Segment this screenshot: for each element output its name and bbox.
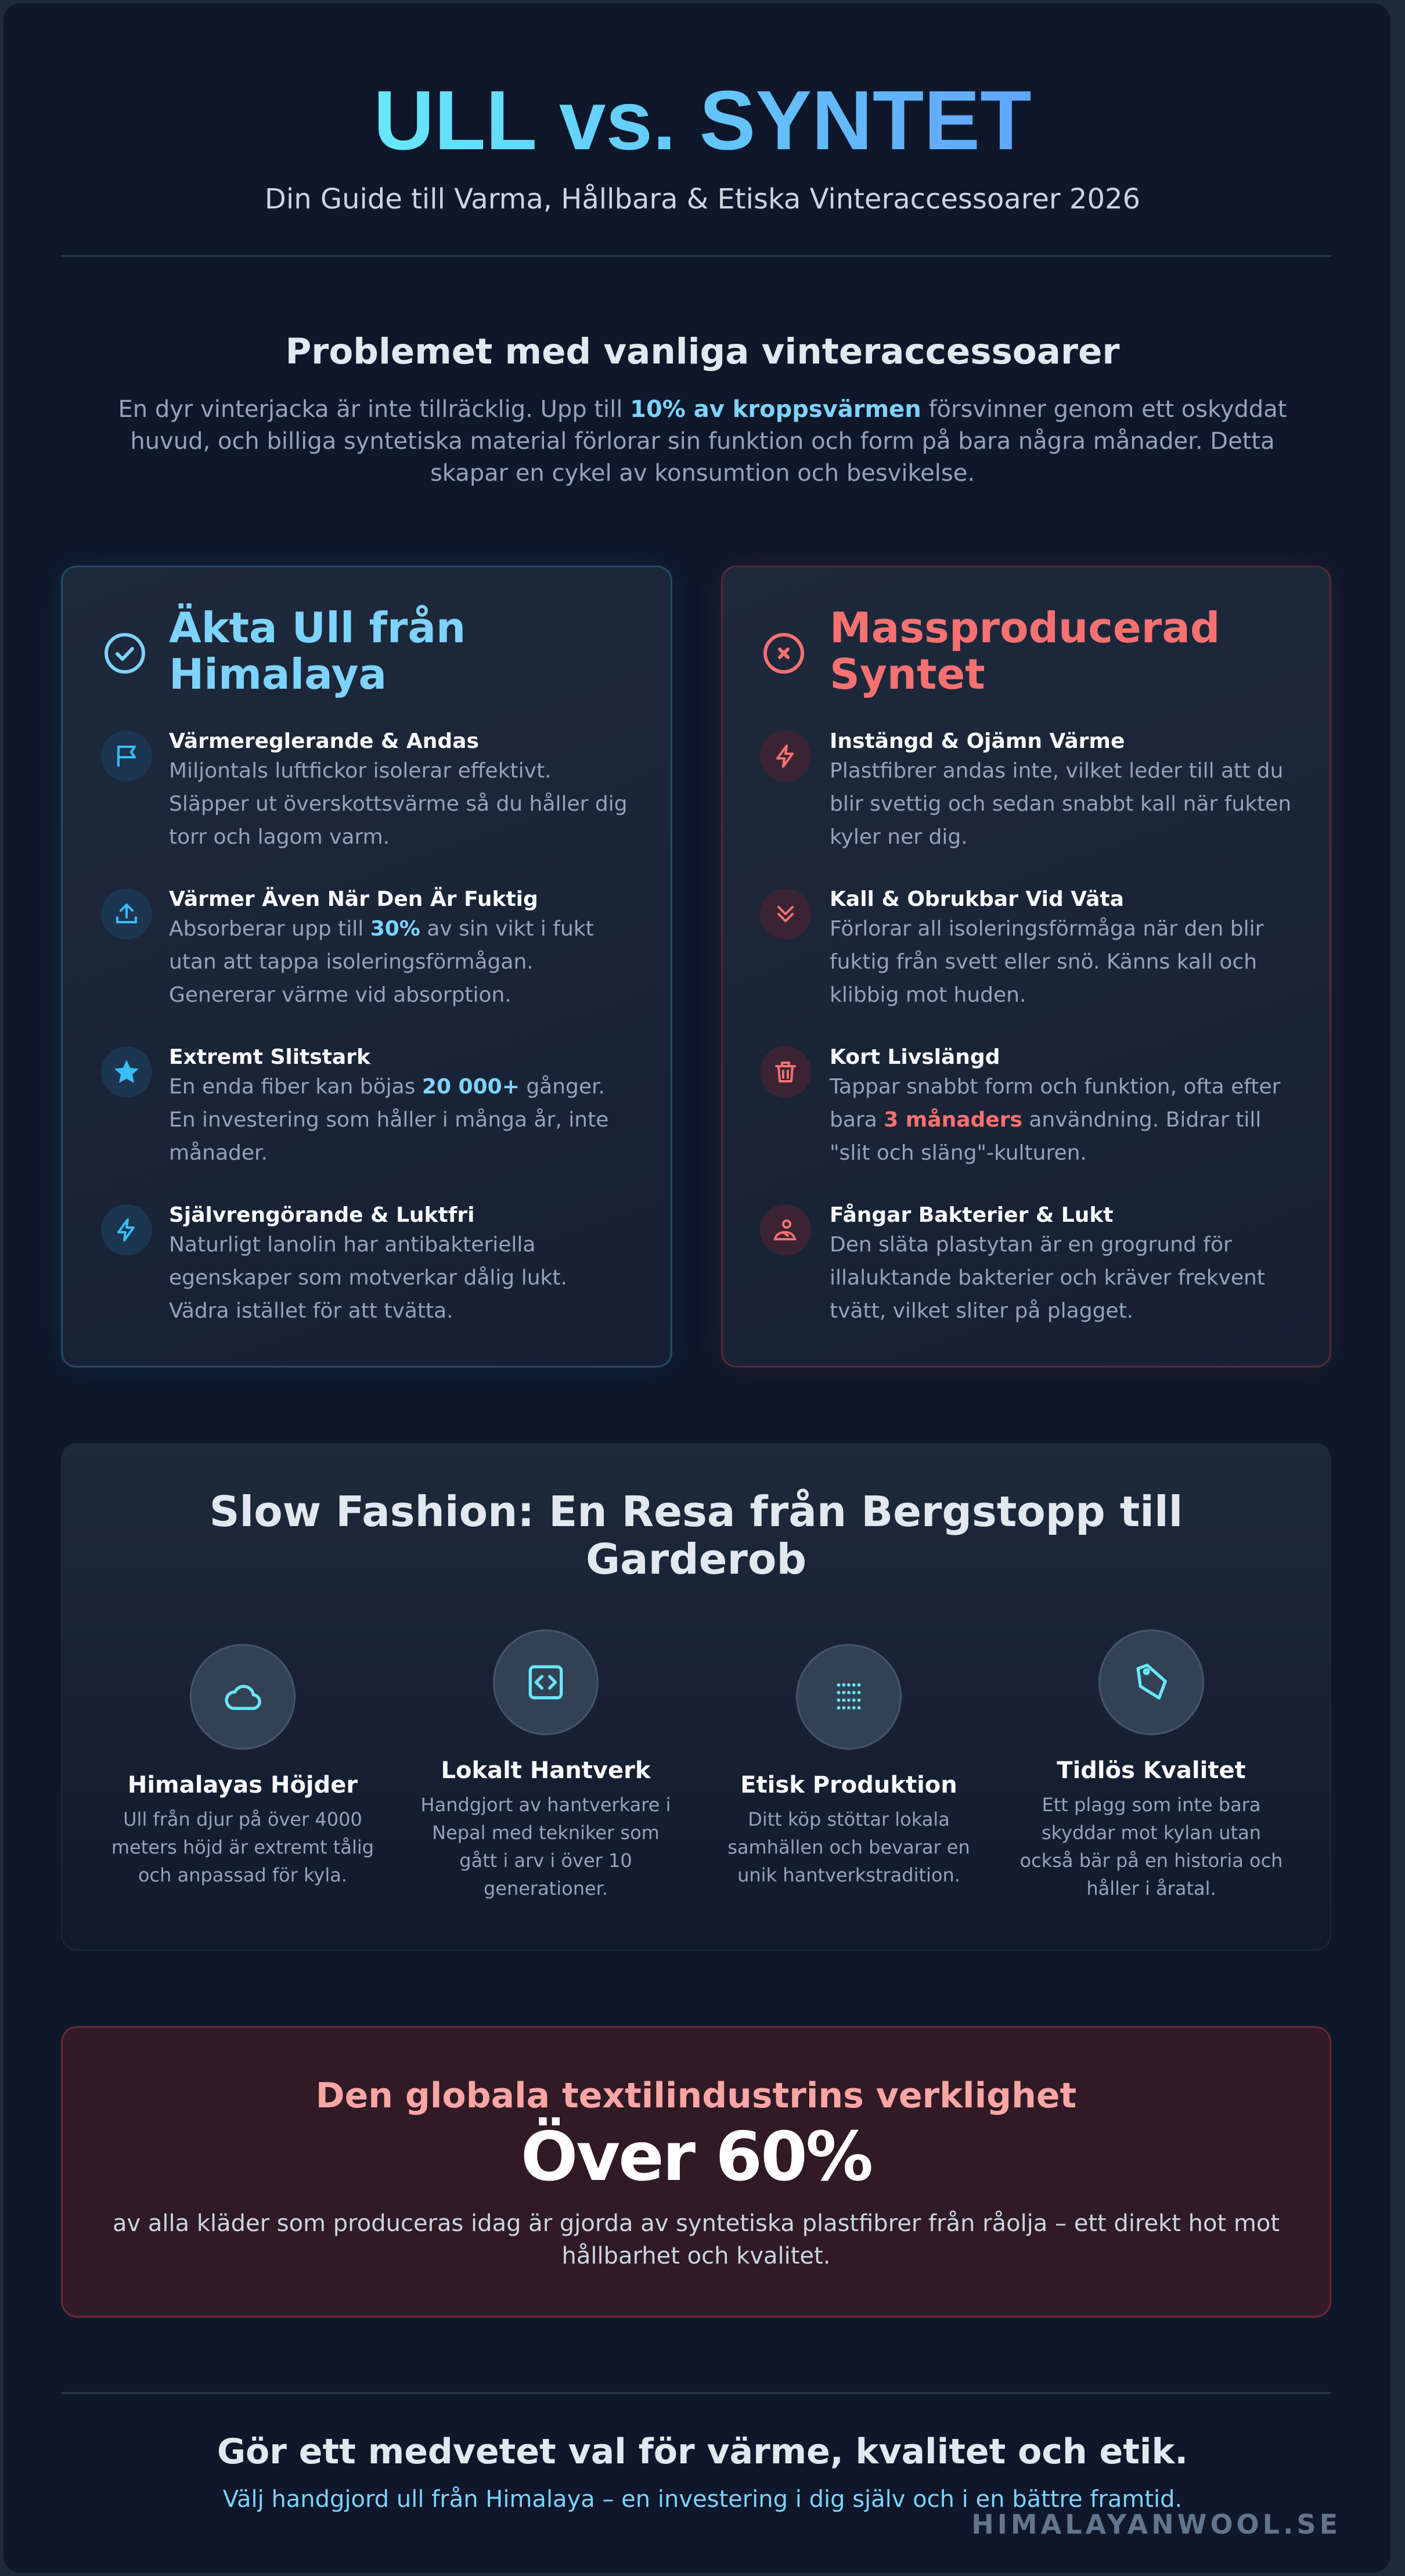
heading: synthetic [830, 603, 1220, 699]
item: cold when wet: Kall & Obrukbar Vid Väta [830, 887, 1124, 911]
item: self-cleaning: Självrengörande & Luktfri [169, 1203, 474, 1227]
item: short lifespan [760, 1045, 1281, 1165]
item: short lifespan: "slit och släng"-kulturen. [830, 1141, 1087, 1165]
item: uneven heat: blir svettig och sedan snabbt kall när fukten [830, 792, 1291, 816]
step: craft: generationer. [484, 1877, 608, 1899]
item: short lifespan: Tappar snabbt form och funktion, ofta efter [830, 1075, 1280, 1099]
item: uneven heat: Plastfibrer andas inte, vilket leder till att du [830, 759, 1283, 783]
item: bacteria: Den släta plastytan är en grogrund för [830, 1233, 1232, 1257]
text block: problem description: skapar en cykel av konsumtion och besvikelse. [430, 460, 975, 487]
item: uneven heat: Instängd & Ojämn Värme [830, 729, 1125, 753]
step: mountains: Ull från djur på över 4000 [123, 1808, 362, 1830]
item: moisture: Värmer Även När Den Är Fuktig [169, 887, 538, 911]
icon: check circle [105, 633, 145, 674]
item: temperature: torr och lagom varm. [169, 825, 390, 849]
item: temperature: Släpper ut överskottsvärme så du håller dig [169, 792, 628, 816]
icon: flag [101, 731, 152, 782]
text block: callout description [113, 2210, 1280, 2269]
item: moisture: utan att tappa isoleringsförmågan. [169, 950, 534, 974]
step: timeless: håller i åratal. [1086, 1877, 1216, 1899]
text block: callout description: hållbarhet och kvalitet. [562, 2243, 830, 2269]
heading: slow fashion [210, 1487, 1183, 1584]
step: ethical [727, 1644, 970, 1886]
title: ULL vs. SYNTET [373, 73, 1032, 167]
heading: wool: Äkta Ull från [169, 603, 466, 652]
step: ethical: Ditt köp stöttar lokala [748, 1808, 950, 1830]
stat: over 60%: Över 60% [521, 2118, 871, 2196]
icon: trash [760, 1046, 811, 1098]
step: mountains: meters höjd är extremt tålig [111, 1836, 374, 1858]
icon: upload [101, 888, 152, 940]
icon: bolt [101, 1204, 152, 1255]
heading: problem: Problemet med vanliga vinteraccessoarer [286, 331, 1119, 372]
icon: bacteria [760, 1204, 811, 1255]
text block: callout description: av alla kläder som produceras idag är gjorda av syntetiska plastfibrer från råolja – ett direkt hot mot [113, 2210, 1280, 2237]
step: timeless: Tidlös Kvalitet [1057, 1757, 1246, 1784]
item: cold when wet: klibbig mot huden. [830, 983, 1026, 1007]
text block: problem description [118, 396, 1287, 487]
panel: wool [61, 566, 672, 1368]
heading: wool: Himalaya [169, 650, 387, 699]
item: temperature: Värmereglerande & Andas [169, 729, 479, 753]
step: craft: Handgjort av hantverkare i [421, 1794, 671, 1816]
text block: problem description: En dyr vinterjacka är inte tillräcklig. Upp till 10% av kroppsvärmen försvinner genom ett oskyddat [118, 396, 1287, 423]
icon: dot grid [796, 1644, 902, 1750]
panel: synthetic [721, 566, 1331, 1368]
item: moisture [101, 887, 594, 1007]
item: bacteria: Fångar Bakterier & Lukt [830, 1203, 1114, 1227]
heading: slow fashion: Garderob [586, 1535, 806, 1584]
item: self-cleaning: Vädra istället för att tvätta. [169, 1299, 453, 1323]
item: durable [101, 1045, 608, 1165]
item: temperature [101, 729, 628, 849]
subtitle: Din Guide till Varma, Hållbara & Etiska Vinteraccessoarer 2026 [265, 183, 1140, 215]
step: craft: gått i arv i över 10 [459, 1850, 632, 1872]
step: craft: Lokalt Hantverk [441, 1757, 650, 1784]
heading: callout: Den globala textilindustrins verklighet [316, 2075, 1076, 2116]
item: bacteria [760, 1203, 1265, 1323]
step: timeless [1020, 1629, 1282, 1899]
heading: synthetic: Syntet [830, 650, 985, 699]
step: craft [421, 1629, 671, 1899]
text block: problem description: huvud, och billiga syntetiska material förlorar sin funktion och form på bara några månader. Detta [130, 428, 1275, 455]
callout: global textile industry [61, 2026, 1331, 2318]
icon: x circle [763, 633, 804, 674]
item: moisture: Genererar värme vid absorption. [169, 983, 511, 1007]
heading: wool [169, 603, 466, 699]
item: temperature: Miljontals luftfickor isolerar effektivt. [169, 759, 552, 783]
icon: tag [1098, 1629, 1204, 1735]
item: short lifespan: Kort Livslängd [830, 1045, 1000, 1069]
footer subtext: Välj handgjord ull från Himalaya – en investering i dig själv och i en bättre framtid. [223, 2486, 1182, 2513]
icon: star [101, 1046, 152, 1098]
icon: cloud [190, 1644, 296, 1750]
step: ethical: samhällen och bevarar en [727, 1836, 970, 1858]
item: cold when wet: fuktig från svett eller snö. Känns kall och [830, 950, 1257, 974]
step: timeless: skyddar mot kylan utan [1042, 1822, 1261, 1844]
item: self-cleaning [101, 1203, 567, 1323]
panel: slow fashion [61, 1443, 1331, 1951]
item: cold when wet: Förlorar all isoleringsförmåga när den blir [830, 917, 1263, 941]
item: bacteria: illaluktande bakterier och kräver frekvent [830, 1266, 1265, 1290]
brand: himalayanwool.se: HIMALAYANWOOL.SE [971, 2509, 1341, 2540]
item: uneven heat: kyler ner dig. [830, 825, 968, 849]
item: durable: En investering som håller i många år, inte [169, 1108, 608, 1132]
item: moisture: Absorberar upp till 30% av sin vikt i fukt [169, 917, 594, 941]
step: craft: Nepal med tekniker som [432, 1822, 660, 1844]
heading: slow fashion: Slow Fashion: En Resa från Bergstopp till [210, 1487, 1183, 1536]
heading: synthetic: Massproducerad [830, 603, 1220, 652]
step: mountains [111, 1644, 374, 1886]
icon: bolt [760, 731, 811, 782]
icon: chevrons down [760, 888, 811, 940]
item: durable: En enda fiber kan böjas 20 000+ gånger. [169, 1075, 605, 1099]
item: cold when wet [760, 887, 1263, 1007]
step: mountains: och anpassad för kyla. [138, 1864, 347, 1886]
step: ethical: Etisk Produktion [740, 1772, 957, 1798]
step: timeless: Ett plagg som inte bara [1042, 1794, 1260, 1816]
item: bacteria: tvätt, vilket sliter på plagget. [830, 1299, 1133, 1323]
footer heading: Gör ett medvetet val för värme, kvalitet och etik. [217, 2431, 1188, 2472]
step: timeless: också bär på en historia och [1020, 1850, 1282, 1872]
item: uneven heat [760, 729, 1291, 849]
item: self-cleaning: egenskaper som motverkar dålig lukt. [169, 1266, 567, 1290]
item: short lifespan: bara 3 månaders användning. Bidrar till [830, 1108, 1261, 1132]
icon: code box [493, 1629, 599, 1735]
item: self-cleaning: Naturligt lanolin har antibakteriella [169, 1233, 535, 1257]
step: mountains: Himalayas Höjder [128, 1772, 358, 1798]
item: durable: Extremt Slitstark [169, 1045, 370, 1069]
item: durable: månader. [169, 1141, 268, 1165]
step: ethical: unik hantverkstradition. [737, 1864, 960, 1886]
